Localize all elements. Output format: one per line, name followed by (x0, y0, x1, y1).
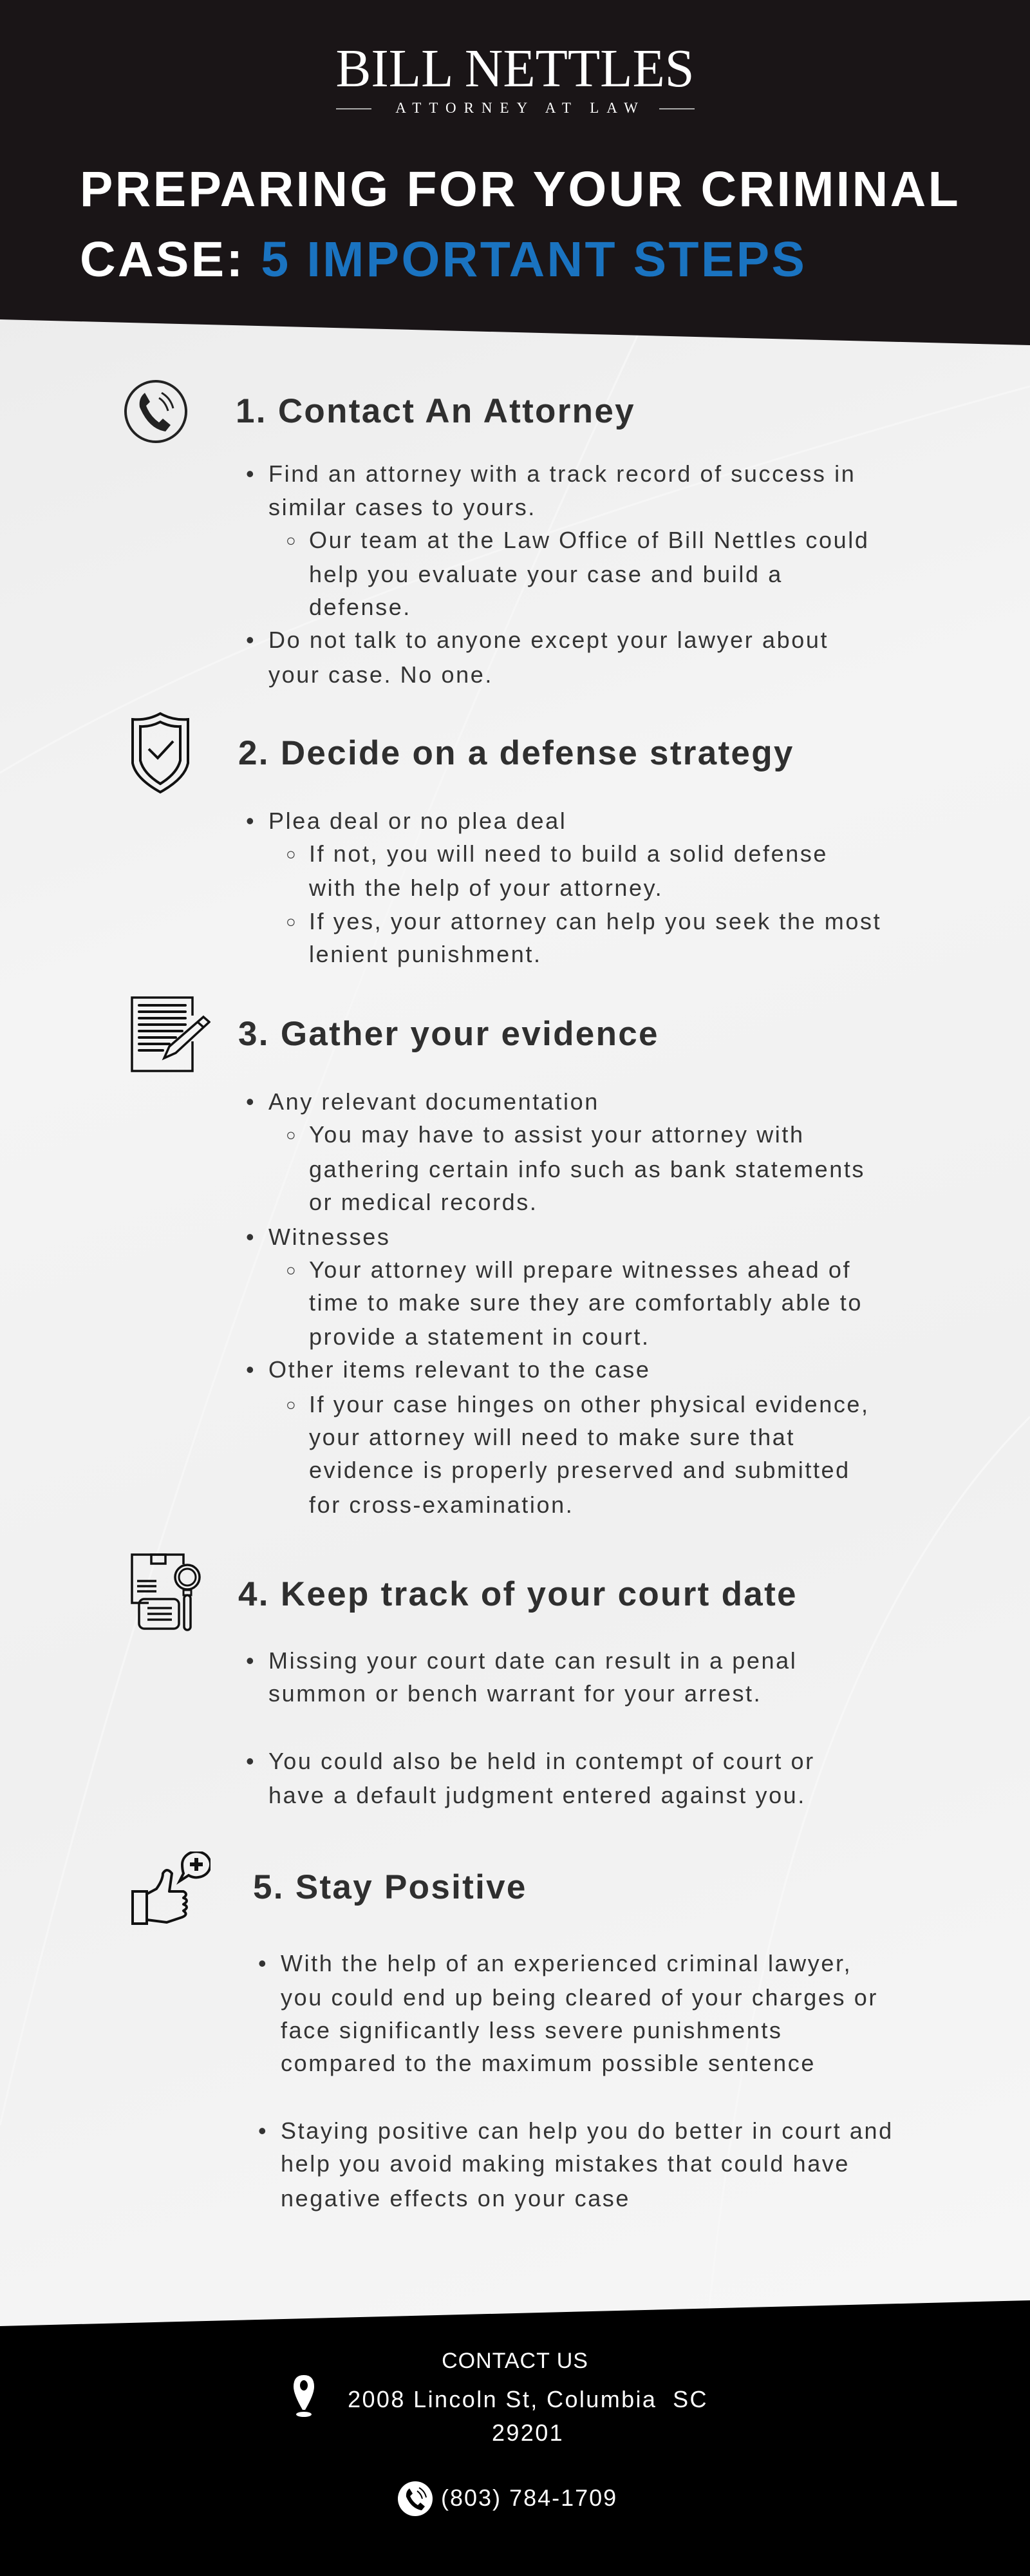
step 3: time to make sure they are comfortably able to (309, 1289, 863, 1316)
title: CASE: 5 IMPORTANT STEPS (80, 232, 807, 287)
step 1 (124, 380, 869, 688)
step 3: • (246, 1356, 256, 1383)
step 3: for cross-examination. (309, 1492, 574, 1518)
bullets: Find an attorney with a track record of success in (268, 460, 856, 487)
bullets: Any relevant documentation (268, 1088, 599, 1115)
step 5 (131, 1852, 894, 2211)
address (349, 2391, 706, 2441)
step 5: you could end up being cleared of your charges or (281, 1984, 878, 2011)
step 3: • (246, 1224, 256, 1250)
bullets: With the help of an experienced criminal lawyer, (281, 1950, 852, 1976)
step 4: summon or bench warrant for your arrest. (268, 1680, 762, 1707)
step 2: lenient punishment. (309, 941, 542, 967)
step 3: Witnesses (268, 1224, 390, 1250)
bullets: Missing your court date can result in a penal (268, 1647, 797, 1674)
step 3: or medical records. (309, 1189, 538, 1215)
heading: 3. Gather your evidence (238, 1015, 659, 1053)
step 4: • (246, 1748, 256, 1774)
step 3: Other items relevant to the case (268, 1356, 650, 1383)
step 5: face significantly less severe punishments (281, 2017, 783, 2043)
step 2: ○ (286, 844, 297, 864)
heading: 1. Contact An Attorney (236, 392, 635, 430)
step 2: with the help of your attorney. (309, 875, 663, 901)
step 1: similar cases to yours. (268, 494, 536, 520)
step 3: gathering certain info such as bank statements (309, 1156, 865, 1182)
step 1: defense. (309, 594, 411, 620)
address: 2008 Lincoln St, Columbia SC (348, 2386, 708, 2412)
step 3: ○ (286, 1260, 297, 1280)
step 1: • (246, 627, 256, 653)
step 1: help you evaluate your case and build a (309, 561, 783, 587)
logo: ATTORNEY AT LAW (395, 100, 646, 116)
step 2: If yes, your attorney can help you seek the most (309, 908, 881, 934)
icon: phone (124, 380, 187, 443)
icon: shield (131, 712, 189, 793)
step 4 (131, 1553, 815, 1808)
heading: 5. Stay Positive (253, 1868, 527, 1906)
step 3: Your attorney will prepare witnesses ahead of (309, 1256, 851, 1283)
title: PREPARING FOR YOUR CRIMINAL (80, 162, 960, 217)
step 5: Staying positive can help you do better in court and (281, 2117, 894, 2144)
contact heading: CONTACT US (442, 2349, 588, 2373)
logo (336, 50, 695, 113)
step 3: You may have to assist your attorney with (309, 1121, 805, 1148)
step 3: evidence is properly preserved and submitted (309, 1457, 850, 1483)
step 3: • (246, 1088, 256, 1115)
address: 29201 (492, 2420, 564, 2446)
heading: 4. Keep track of your court date (238, 1575, 798, 1613)
bullets: Plea deal or no plea deal (268, 808, 566, 834)
title (82, 171, 957, 277)
step 4: You could also be held in contempt of court or (268, 1748, 815, 1774)
step 3: your attorney will need to make sure that (309, 1424, 795, 1450)
step 5: help you avoid making mistakes that could have (281, 2150, 850, 2177)
step 3: provide a statement in court. (309, 1323, 650, 1350)
icon: location pin (294, 2375, 314, 2417)
step 2: If not, you will need to build a solid defense (309, 840, 828, 867)
step 1: ○ (286, 531, 297, 550)
step 4: • (246, 1647, 256, 1674)
header band (0, 0, 1030, 348)
step 3: ○ (286, 1395, 297, 1414)
step 2: • (246, 808, 256, 834)
step 1: your case. No one. (268, 661, 493, 688)
step 5: negative effects on your case (281, 2185, 630, 2211)
step 2 (131, 712, 881, 967)
step 3 (131, 996, 870, 1518)
footer (0, 2299, 1030, 2576)
heading: 2. Decide on a defense strategy (238, 734, 794, 772)
logo: BILL NETTLES (335, 39, 695, 99)
icon: thumbs up (131, 1852, 211, 1925)
step 4: have a default judgment entered against you. (268, 1782, 806, 1808)
step 1: • (246, 460, 256, 487)
step 1: Our team at the Law Office of Bill Nettles could (309, 527, 869, 553)
icon: document with pencil (131, 996, 211, 1072)
phone (398, 2481, 615, 2516)
step 1: Do not talk to anyone except your lawyer about (268, 627, 829, 653)
step 5: • (258, 2117, 268, 2144)
step 2: ○ (286, 912, 297, 931)
step 5: • (258, 1950, 268, 1976)
phone: (803) 784-1709 (441, 2485, 617, 2511)
step 5: compared to the maximum possible sentence (281, 2050, 816, 2076)
icon: box with magnifier (131, 1553, 201, 1631)
step 3: ○ (286, 1125, 297, 1144)
step 3: If your case hinges on other physical evidence, (309, 1391, 870, 1417)
icon: phone (398, 2481, 433, 2516)
